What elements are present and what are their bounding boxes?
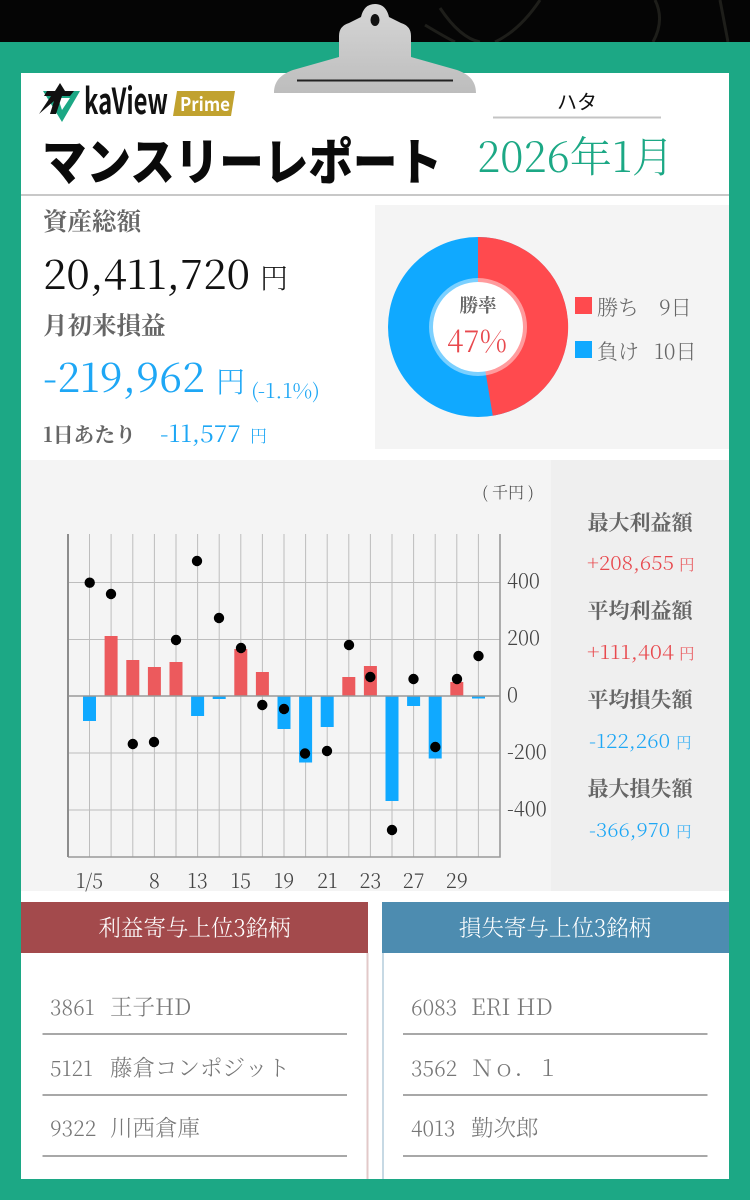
value: month-to-date profit and loss: -219,962 [43,347,205,404]
legend: wins: 9日 [659,292,692,322]
legend: wins: 勝ち [597,292,639,322]
y axis labels: -200 [507,736,547,765]
win rate label: 勝率 [459,292,497,318]
stat: max loss [588,773,694,843]
stat: average loss: -122,260 [589,726,670,754]
stat: max profit: 最大利益額 [588,507,694,537]
stat: average loss: 円 [676,731,692,753]
legend: losses: 負け [597,336,639,366]
x axis labels [76,865,468,894]
header divider [21,194,729,196]
label: month-to-date profit and loss: 月初来損益 [43,307,166,342]
stat: max loss: 円 [676,820,692,842]
stat: average profit: +111,404 [587,637,674,665]
row: 4013 [403,1111,708,1157]
x axis labels: 1/5 [76,865,103,894]
x axis labels: 23 [359,865,381,894]
value: month-to-date profit and loss: (-1.1%) [251,375,320,404]
y axis labels [507,565,547,822]
row: 6083 [403,990,708,1035]
row: 3562: 3562 [411,1053,457,1083]
legend: losses: 10日 [654,336,696,366]
stat: average profit: 平均利益額 [588,595,694,625]
heading [21,902,368,953]
stat: max loss: -366,970 [589,815,670,843]
unit label: ( 千円 ) [482,480,534,503]
row: 6083: ERI HD [471,990,553,1022]
row: 3861: 王子HD [110,990,191,1022]
stat: average loss [588,684,694,754]
y axis labels: -400 [507,793,547,822]
row: 5121 [42,1051,347,1096]
value: total assets: 20,411,720 [43,244,250,301]
y axis labels: 0 [507,679,518,708]
x axis labels: 8 [149,865,160,894]
value: month-to-date profit and loss [43,347,320,404]
value: month-to-date profit and loss: 円 [216,360,245,401]
icon: clipboard clip [274,4,476,93]
loss bars [83,696,485,801]
panel: top 3 profit contributors: 利益寄与上位3銘柄 [98,911,291,943]
stat: max profit: +208,655 [587,548,674,576]
user name: ハタ [557,86,597,115]
x axis labels: 29 [446,865,468,894]
grid lines [68,534,500,857]
row: 5121: 藤倉コンポジット [110,1051,290,1083]
axes [68,534,500,857]
row: 9322: 川西倉庫 [110,1111,200,1143]
legend: wins [575,292,692,322]
profit bars [105,636,463,696]
stat: average profit [587,595,695,665]
row: 4013: 4013 [411,1113,455,1143]
per-day value: 1日あたり [43,418,136,448]
per-day value [43,416,267,449]
bar chart [68,534,500,857]
logo: kaView Prime: kaView [84,73,168,125]
x axis labels: 21 [317,865,337,894]
legend: losses [575,336,696,366]
panel: top 3 profit contributors [21,902,368,1179]
logo: kaView Prime [39,73,235,125]
logo: kaView Prime: Prime [180,90,230,117]
cumulative points [84,556,484,835]
heading [382,902,729,953]
row: 9322 [42,1111,347,1157]
stat: max loss: 最大損失額 [588,773,694,803]
donut chart [388,237,568,417]
row: 3861: 3861 [50,992,95,1022]
row: 3562 [403,1052,708,1096]
panel: daily profit and loss chart [21,460,551,894]
x axis labels: 13 [187,865,208,894]
row: 3562: Ｎｏ．１ [471,1052,559,1083]
row: 6083: 6083 [411,992,457,1022]
x axis labels: 19 [274,865,294,894]
x axis labels: 27 [403,865,425,894]
stat: average loss: 平均損失額 [588,684,694,714]
stat: max profit [587,507,695,576]
dark photo background strip [0,0,750,42]
title: マンスリーレポート [42,123,442,195]
report month: 2026年1月 [477,125,674,185]
y axis labels: 200 [507,622,540,651]
row: 4013: 勤次郎 [471,1111,539,1143]
panel: profit and loss statistics [551,460,729,891]
label: total assets: 資産総額 [43,203,142,238]
win rate value: 47% [447,317,507,361]
stat: max profit: 円 [679,553,695,575]
panel: top 3 loss contributors: 損失寄与上位3銘柄 [459,911,651,943]
x axis labels: 15 [231,865,251,894]
row: 9322: 9322 [50,1113,96,1143]
value: total assets: 円 [260,257,288,297]
y axis labels: 400 [507,565,540,594]
per-day value: -11,577 [160,416,241,449]
row: 5121: 5121 [50,1053,93,1083]
per-day value: 円 [250,422,267,447]
panel: win rate [375,205,729,449]
panel: top 3 loss contributors [382,902,729,1179]
stat: average profit: 円 [679,642,695,664]
panel: asset summary [43,203,320,449]
row: 3861 [42,990,347,1035]
